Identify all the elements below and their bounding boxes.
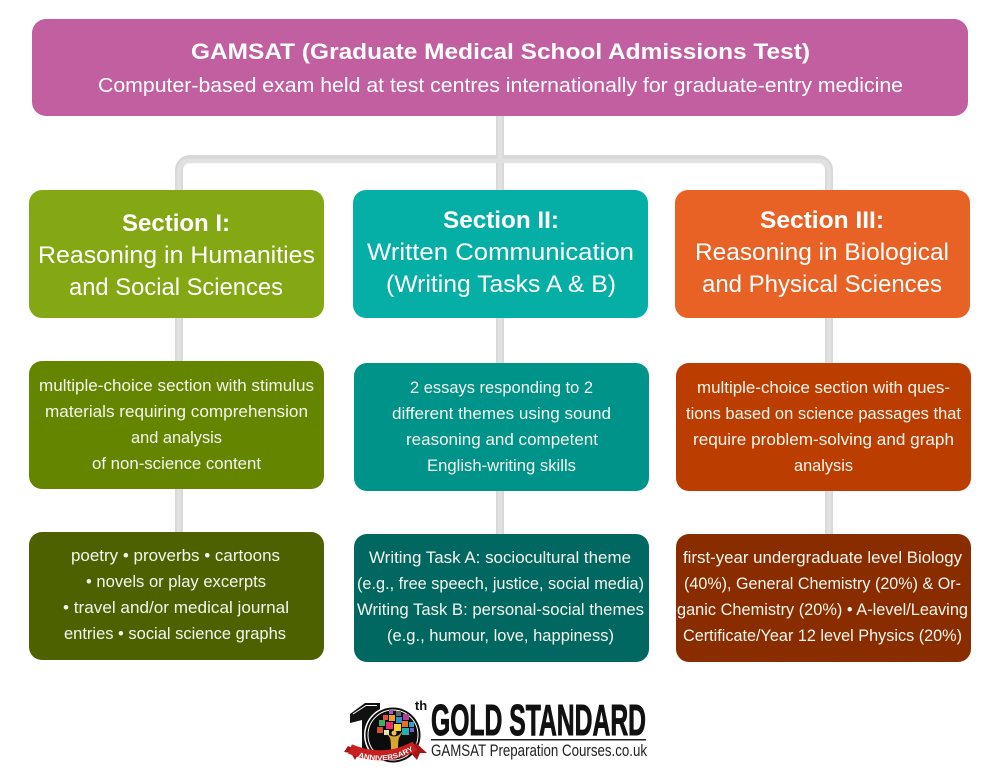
panel: Section I heading: Reasoning in Humanities xyxy=(38,242,315,269)
panel: Section II format: reasoning and competent xyxy=(406,430,598,449)
panel: Section II format: English-writing skills xyxy=(427,456,576,475)
header subtitle: Computer-based exam held at test centres internationally for graduate-entry medicine xyxy=(98,74,903,97)
panel: Section I content xyxy=(29,532,324,660)
panel: Section I format: and analysis xyxy=(131,428,222,447)
panel: Section III content xyxy=(676,534,971,662)
panel: Section III format: analysis xyxy=(794,456,853,475)
panel: Section III heading: and Physical Sciences xyxy=(702,271,942,298)
panel: Section I content: • travel and/or medical journal xyxy=(63,598,289,617)
panel: Section II heading: (Writing Tasks A & B) xyxy=(386,271,616,298)
connector lines xyxy=(179,116,829,534)
panel: Section I heading xyxy=(29,190,324,318)
panel: Section III heading: Reasoning in Biological xyxy=(695,239,949,266)
panel: Section III content: first-year undergraduate level Biology xyxy=(683,548,962,567)
logo: Gold Standard 10th anniversary xyxy=(344,696,647,762)
header title: GAMSAT (Graduate Medical School Admissions Test) xyxy=(191,39,810,64)
panel: Section II content: Writing Task A: sociocultural theme xyxy=(369,548,631,567)
panel: Section II heading xyxy=(353,190,648,318)
panel: Section III content: Certificate/Year 12 level Physics (20%) xyxy=(683,626,962,645)
panel: Section I content: • novels or play excerpts xyxy=(86,572,266,591)
panel: Section II format: different themes using sound xyxy=(392,404,611,423)
panel: Section I format: materials requiring comprehension xyxy=(45,402,308,421)
panel: Section I heading: Section I: xyxy=(122,210,230,237)
logo: Gold Standard 10th anniversary: ANNIVERSARY xyxy=(358,746,412,760)
logo: 10th superscript: th xyxy=(415,698,427,713)
header panel xyxy=(32,19,968,116)
panel: Section I heading: and Social Sciences xyxy=(69,274,283,301)
panel: Section II heading: Section II: xyxy=(443,207,559,234)
panel: Section I format: of non-science content xyxy=(92,454,261,473)
panel: Section III format xyxy=(676,363,971,491)
panel: Section I content: poetry • proverbs • cartoons xyxy=(71,546,280,565)
panel: Section III heading xyxy=(675,190,970,318)
panel: Section III format: multiple-choice section with ques- xyxy=(697,378,950,397)
panel: Section I format xyxy=(29,361,324,489)
panel: Section III content: (40%), General Chemistry (20%) & Or- xyxy=(684,574,961,593)
panel: Section III heading: Section III: xyxy=(760,207,884,234)
panel: Section II content: Writing Task B: personal-social themes xyxy=(357,600,644,619)
logo: Gold Standard wordmark: GOLD STANDARD xyxy=(431,696,646,745)
panel: Section III format: require problem-solving and graph xyxy=(693,430,954,449)
logo: tagline: GAMSAT Preparation Courses.co.uk xyxy=(431,741,647,760)
panel: Section III format: tions based on science passages that xyxy=(686,404,961,423)
panel: Section II heading: Written Communication xyxy=(367,239,634,266)
panel: Section I content: entries • social science graphs xyxy=(64,624,286,643)
panel: Section I format: multiple-choice section with stimulus xyxy=(39,376,314,395)
panel: Section II content: (e.g., free speech, justice, social media) xyxy=(357,574,644,593)
panel: Section III content: ganic Chemistry (20%) • A-level/Leaving xyxy=(677,600,968,619)
panel: Section II content xyxy=(354,534,649,662)
panel: Section II format xyxy=(354,363,649,491)
panel: Section II format: 2 essays responding to 2 xyxy=(410,378,593,397)
panel: Section II content: (e.g., humour, love, happiness) xyxy=(387,626,614,645)
